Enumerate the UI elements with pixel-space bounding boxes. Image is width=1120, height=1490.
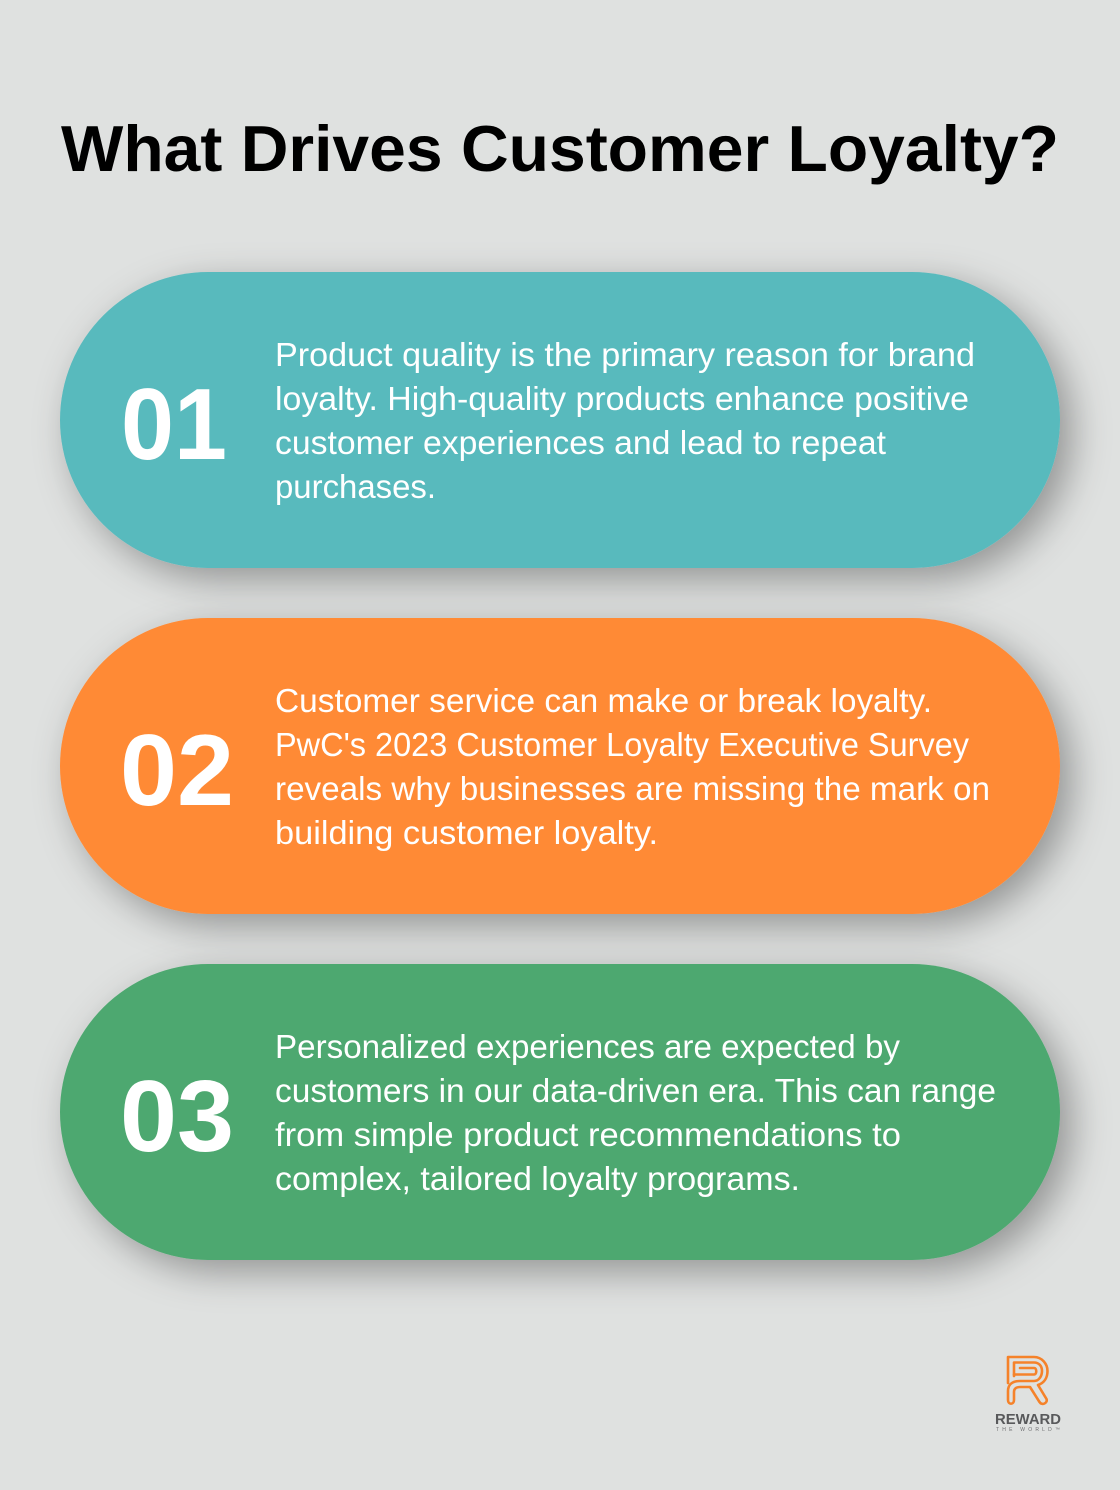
text block 03: Personalized experiences are expected by	[275, 1028, 900, 1065]
text block 02: building customer loyalty.	[275, 814, 658, 851]
text block 03: from simple product recommendations to	[275, 1116, 901, 1153]
logo wordmark: REWARD	[995, 1411, 1061, 1428]
text block 03: customers in our data-driven era. This can range	[275, 1072, 996, 1109]
text block 02: Customer service can make or break loyalty.	[275, 682, 932, 719]
text block 01: purchases.	[275, 468, 436, 505]
text block 01: Product quality is the primary reason for brand	[275, 336, 975, 373]
number 01: 01	[121, 369, 227, 481]
panel: step 03 personalized experiences	[60, 964, 1060, 1260]
text block 02: PwC's 2023 Customer Loyalty Executive Survey	[275, 726, 969, 763]
text block 02: reveals why businesses are missing the mark on	[275, 770, 990, 807]
pill background 01	[60, 272, 1060, 568]
logo: Reward the World	[995, 1357, 1061, 1433]
number 02: 02	[120, 715, 234, 827]
title: What Drives Customer Loyalty?	[61, 112, 1059, 185]
panel: step 02 customer service	[60, 618, 1060, 914]
text block 03	[275, 1028, 996, 1197]
number 03: 03	[120, 1061, 234, 1173]
panel: step 01 product quality	[60, 272, 1060, 568]
icon: R mark	[1008, 1357, 1048, 1404]
text block 03: complex, tailored loyalty programs.	[275, 1160, 800, 1197]
pill background 02	[60, 618, 1060, 914]
text block 02	[275, 682, 990, 851]
text block 01: customer experiences and lead to repeat	[275, 424, 886, 461]
text block 01	[275, 336, 975, 505]
pill background 03	[60, 964, 1060, 1260]
logo tagline: THE WORLD™	[996, 1427, 1060, 1433]
text block 01: loyalty. High-quality products enhance positive	[275, 380, 969, 417]
